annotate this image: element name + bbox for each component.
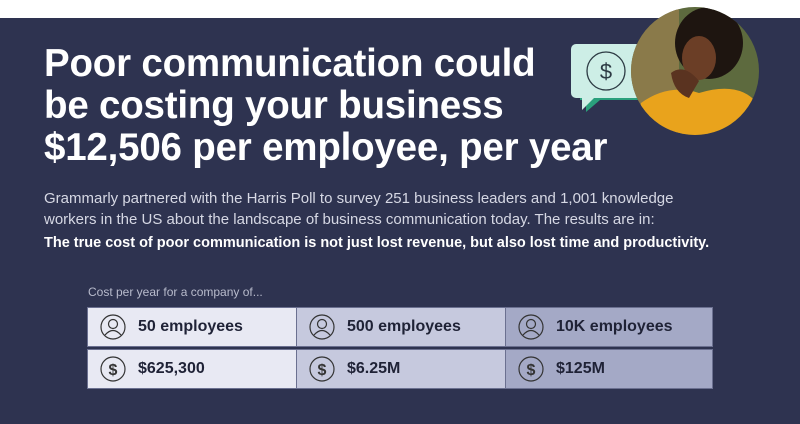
cell: 500 employees — [296, 307, 506, 347]
cell: 50 employees — [87, 307, 297, 347]
title: Poor communication could — [44, 42, 535, 85]
cost table — [87, 307, 713, 389]
intro paragraph: Grammarly partnered with the Harris Poll to survey 251 business leaders and 1,001 knowledge workers in the US about the landscape of business communication today. The results are in: — [44, 190, 674, 228]
cell: $625,300 — [87, 349, 297, 389]
cell: $125M: $ — [527, 362, 536, 379]
icon: speech bubble with dollar — [571, 44, 638, 112]
cell: 10K employees: 10K employees — [556, 318, 673, 335]
cell: 50 employees: 50 employees — [138, 318, 243, 335]
title: be costing your business — [44, 84, 503, 127]
icon: speech bubble with dollar: $ — [600, 59, 612, 84]
cell: $625,300: $ — [109, 362, 118, 379]
cell: $6.25M: $ — [318, 362, 327, 379]
cell: $125M — [505, 349, 713, 389]
title: $12,506 per employee, per year — [44, 126, 607, 169]
cell: $6.25M: $6.25M — [347, 360, 400, 377]
key statement: The true cost of poor communication is not just lost revenue, but also lost time and productivity. — [44, 235, 709, 251]
cell: 10K employees — [505, 307, 713, 347]
cell: 500 employees: 500 employees — [347, 318, 461, 335]
cell: $6.25M — [296, 349, 506, 389]
photo: woman portrait — [631, 7, 759, 135]
cell: $125M: $125M — [556, 360, 605, 377]
cell: $625,300: $625,300 — [138, 360, 205, 377]
title — [44, 42, 607, 169]
table caption: Cost per year for a company of... — [88, 285, 263, 299]
